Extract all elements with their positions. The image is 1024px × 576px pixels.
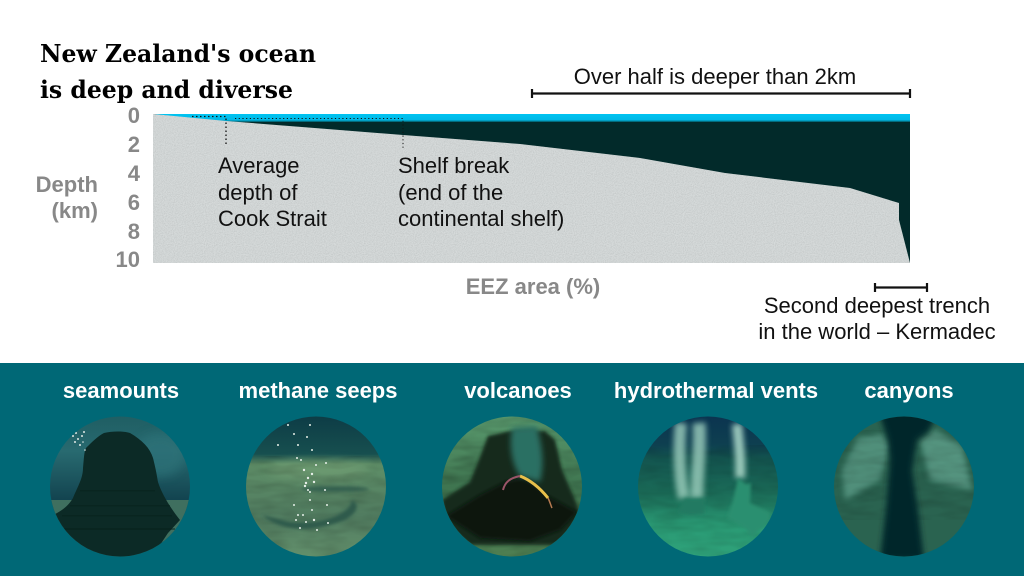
y axis labels: 10 bbox=[116, 247, 140, 272]
label: shelf break: Shelf break bbox=[398, 153, 510, 178]
category labels: hydrothermal vents bbox=[614, 378, 818, 403]
bracket: over half bbox=[532, 89, 910, 98]
x axis title: EEZ area (%) bbox=[466, 274, 600, 299]
y axis labels bbox=[116, 103, 141, 272]
y axis labels: 6 bbox=[128, 190, 140, 215]
image: seamount bbox=[50, 416, 190, 560]
image: canyon bbox=[834, 410, 974, 560]
category labels: canyons bbox=[864, 378, 954, 403]
bracket: trench bbox=[875, 283, 927, 292]
category labels: seamounts bbox=[63, 378, 179, 403]
panel: background band bbox=[0, 363, 1024, 576]
seabed profile bbox=[153, 114, 910, 263]
dotted line: Cook Strait bbox=[192, 116, 226, 146]
deep water area bbox=[153, 114, 910, 263]
y axis labels: 2 bbox=[128, 132, 140, 157]
label: shelf break: (end of the bbox=[398, 180, 503, 205]
image: volcano bbox=[442, 416, 582, 557]
title: is deep and diverse bbox=[40, 75, 293, 104]
image: methane seeps bbox=[246, 416, 386, 557]
label: trench: Second deepest trench bbox=[764, 293, 990, 318]
label: Cook Strait: Cook Strait bbox=[218, 206, 327, 231]
surface water band bbox=[153, 114, 910, 122]
label: shelf break: continental shelf) bbox=[398, 206, 564, 231]
category labels: methane seeps bbox=[239, 378, 397, 403]
y axis labels: 4 bbox=[128, 161, 141, 186]
label: Cook Strait: Average bbox=[218, 153, 300, 178]
y axis title: Depth bbox=[36, 172, 98, 197]
label: Cook Strait: depth of bbox=[218, 180, 298, 205]
label: trench: in the world – Kermadec bbox=[758, 319, 996, 344]
depth profile chart bbox=[116, 103, 910, 272]
category labels: volcanoes bbox=[464, 378, 572, 403]
dotted line: shelf break bbox=[235, 118, 403, 148]
label: over half: Over half is deeper than 2km bbox=[574, 64, 856, 89]
y axis labels: 0 bbox=[128, 103, 140, 128]
title: New Zealand's ocean bbox=[40, 39, 316, 68]
title bbox=[40, 39, 316, 104]
y axis title: (km) bbox=[52, 198, 98, 223]
image: hydrothermal vents bbox=[638, 416, 778, 557]
y axis labels: 8 bbox=[128, 219, 140, 244]
category labels bbox=[63, 378, 954, 403]
